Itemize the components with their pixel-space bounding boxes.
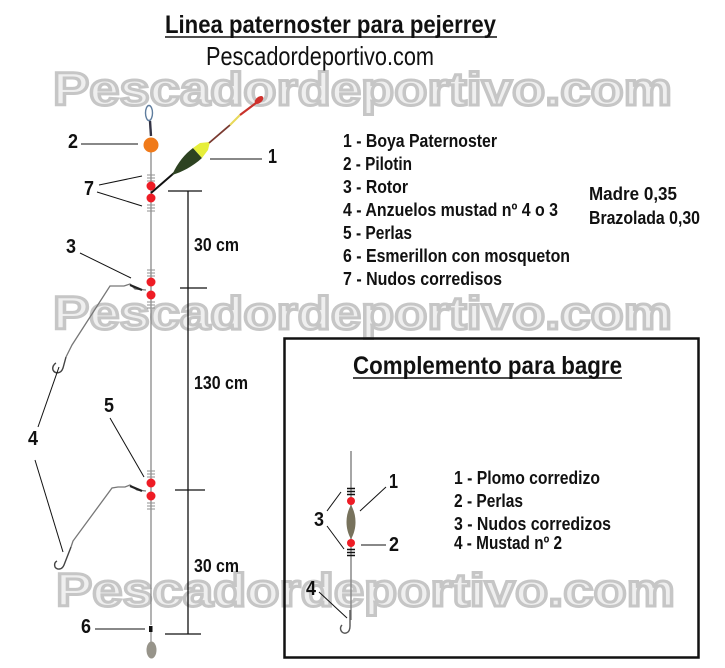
main line [150, 144, 152, 625]
icons: knots [347, 488, 355, 556]
subtitle: Pescadordeportivo.com [206, 41, 434, 71]
bagre rig [340, 451, 356, 633]
lower hook leader [55, 485, 146, 569]
line specs: Madre 0,35 [589, 184, 677, 204]
bagre legend: 3 - Nudos corredizos [454, 514, 611, 534]
measurement labels: 30 cm [194, 556, 239, 576]
upper hook leader [53, 284, 146, 373]
icon: pilotin bead [144, 138, 158, 152]
panel: complemento para bagre: 3 [314, 509, 324, 531]
legend list: 3 - Rotor [343, 177, 408, 197]
line specs [589, 184, 700, 228]
callout numbers main rig: 7 [84, 178, 94, 200]
callout numbers main rig: 6 [81, 616, 91, 638]
legend list: 1 - Boya Paternoster [343, 131, 497, 151]
measurement bars [165, 191, 207, 634]
bagre legend [454, 468, 611, 553]
callout numbers main rig [28, 131, 277, 638]
callout numbers main rig: 5 [104, 395, 114, 417]
icons: red beads [146, 182, 156, 500]
measurement labels [194, 235, 248, 576]
legend list: 7 - Nudos corredisos [343, 269, 502, 289]
watermarks: Pescadordeportivo.com [53, 287, 672, 339]
bagre legend: 2 - Perlas [454, 491, 523, 511]
legend list: 6 - Esmerillon con mosqueton [343, 246, 570, 266]
panel: complemento para bagre: 2 [389, 534, 399, 556]
icons: sliding knots [147, 175, 155, 509]
panel: complemento para bagre: 1 [389, 471, 398, 493]
callout numbers main rig: 2 [68, 131, 78, 153]
measurement labels: 130 cm [194, 373, 248, 393]
legend list: 2 - Pilotin [343, 154, 412, 174]
callout leader lines [35, 144, 262, 629]
icon: top snap swivel [146, 106, 152, 136]
bagre legend: 4 - Mustad nº 2 [454, 533, 562, 553]
watermarks: Pescadordeportivo.com [56, 564, 675, 616]
callout numbers main rig: 3 [66, 236, 76, 258]
icons: beads [347, 497, 355, 505]
icon: float [151, 94, 265, 193]
legend list: 5 - Perlas [343, 223, 412, 243]
title: Linea paternoster para pejerrey [165, 11, 496, 39]
callout numbers main rig: 1 [268, 146, 277, 168]
panel: complemento para bagre [284, 338, 698, 658]
panel: complemento para bagre: 4 [306, 578, 317, 600]
watermarks [53, 63, 675, 616]
icon: end snap and lead [146, 626, 156, 658]
legend list: 4 - Anzuelos mustad nº 4 o 3 [343, 200, 558, 220]
measurement labels: 30 cm [194, 235, 239, 255]
line specs: Brazolada 0,30 [589, 208, 700, 228]
callout numbers main rig: 4 [28, 428, 39, 450]
icon: sliding lead [346, 505, 356, 539]
main line rig [53, 94, 265, 659]
bagre callouts [319, 487, 386, 618]
bagre legend: 1 - Plomo corredizo [454, 468, 600, 488]
panel heading: Complemento para bagre [353, 352, 622, 380]
legend list [343, 131, 570, 289]
watermarks: Pescadordeportivo.com [53, 63, 672, 115]
